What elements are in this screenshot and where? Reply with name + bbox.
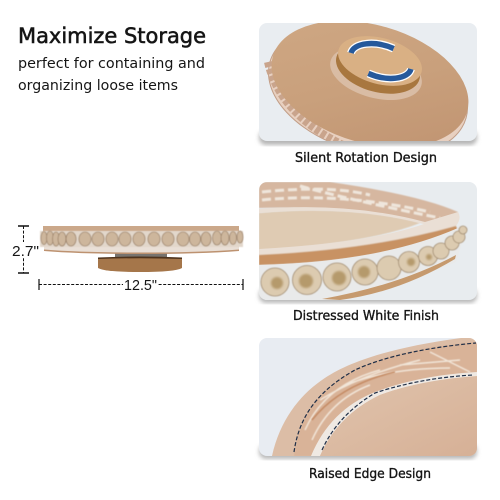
white bead band	[259, 228, 466, 300]
icon: rotation arrows	[347, 38, 415, 84]
mount ring	[330, 52, 422, 100]
panel: distressed finish	[259, 182, 477, 303]
carved band	[294, 342, 477, 456]
metal bearing	[115, 253, 167, 259]
orange stripe	[259, 226, 458, 265]
hub top	[338, 36, 422, 86]
carving lines	[305, 352, 470, 440]
bead band	[40, 231, 243, 247]
metal gap	[349, 64, 407, 96]
panel shadow	[259, 444, 477, 459]
disc underside	[272, 23, 468, 141]
width label: 12.5"	[124, 277, 157, 294]
title: Maximize Storage	[18, 24, 206, 48]
outer edge	[272, 336, 477, 456]
carving highlights	[262, 186, 440, 218]
white inner rim	[311, 372, 477, 456]
dashed outlines	[294, 343, 476, 452]
lower stripe	[322, 255, 456, 300]
panel shadow	[259, 288, 477, 303]
carved band	[259, 182, 458, 222]
top rim	[43, 226, 239, 232]
floor	[320, 376, 477, 456]
lazy susan side	[40, 226, 243, 272]
height dimension	[18, 226, 29, 273]
wooden base	[98, 257, 182, 272]
bead distress	[271, 254, 432, 289]
width dimension	[39, 279, 243, 290]
beaded edge	[268, 48, 468, 141]
panel: raised edge	[259, 336, 477, 459]
product side view with dimensions	[11, 226, 243, 294]
beads	[41, 231, 243, 246]
height label: 2.7"	[12, 243, 39, 260]
subtitle: perfect for containing and	[18, 56, 205, 72]
white rim	[259, 207, 460, 255]
hub side	[336, 53, 420, 94]
caption: Raised Edge Design	[309, 467, 431, 482]
floor	[259, 211, 420, 250]
caption: Distressed White Finish	[293, 309, 439, 324]
panel background	[259, 338, 477, 456]
panel: silent rotation	[256, 23, 480, 146]
panel background	[259, 23, 477, 141]
caption: Silent Rotation Design	[295, 151, 437, 166]
beads	[261, 226, 467, 296]
panel background	[259, 182, 477, 300]
bottom rim	[44, 245, 239, 254]
panel shadow	[259, 130, 477, 145]
subtitle: organizing loose items	[18, 78, 178, 94]
